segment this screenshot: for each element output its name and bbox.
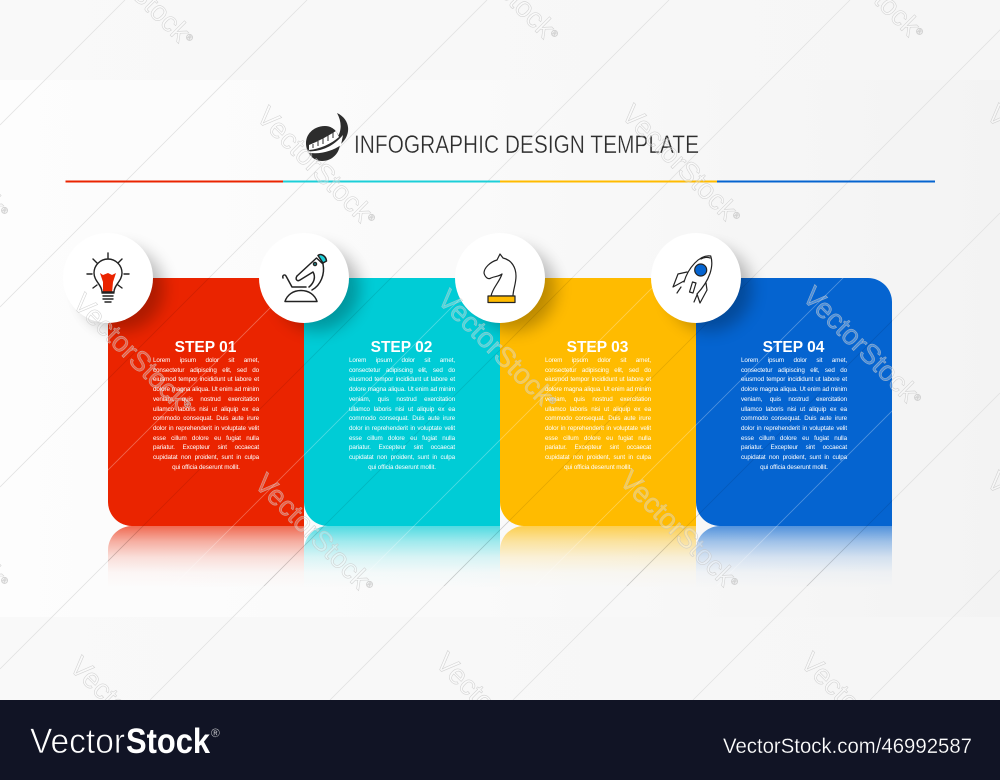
watermarks: VectorStock xyxy=(616,98,743,226)
footer logo: Vector xyxy=(30,722,125,761)
circle badge: step 04 with rocket icon xyxy=(651,233,752,331)
text block: step 01: ullamco laboris nisi ut aliquip ex ea xyxy=(153,406,259,413)
panel card: step 03 yellow xyxy=(500,278,696,526)
reflection: step 02 xyxy=(304,526,500,588)
watermarks: VectorStock xyxy=(251,100,378,228)
footer url: VectorStock.com/46992587 xyxy=(723,735,972,758)
text block: step 02: qui officia deserunt mollit. xyxy=(368,464,436,471)
reflection: step 03 xyxy=(500,526,696,588)
heading: step 04: STEP 04 xyxy=(763,338,824,356)
footer bar xyxy=(0,700,1000,780)
watermarks: ® xyxy=(549,28,561,40)
text block: step 01: eiusmod tempor incididunt ut labore et xyxy=(153,376,259,383)
watermarks: VectorStock xyxy=(795,646,922,774)
text block: step 03: eiusmod tempor incididunt ut labore et xyxy=(545,376,651,383)
text block: step 02: commodo consequat. Duis aute irure xyxy=(349,415,455,422)
text block: step 04: commodo consequat. Duis aute irure xyxy=(741,415,847,422)
watermarks: ® xyxy=(729,576,741,588)
watermarks: ® xyxy=(912,392,924,404)
text block: step 02: ullamco laboris nisi ut aliquip ex ea xyxy=(349,406,455,413)
text block: step 04: esse cillum dolore eu fugiat nulla xyxy=(741,435,847,442)
icon: microscope xyxy=(283,255,326,302)
watermarks: VectorStock xyxy=(614,464,741,592)
text block: step 01: qui officia deserunt mollit. xyxy=(172,464,240,471)
text block: step 02: eiusmod tempor incididunt ut labore et xyxy=(349,376,455,383)
watermarks: ® xyxy=(910,758,922,770)
text block: step 04 xyxy=(741,357,848,471)
watermarks: ® xyxy=(545,758,557,770)
panel card: step 01 red xyxy=(108,278,304,526)
text block: step 02 xyxy=(349,357,456,471)
heading: step 03: STEP 03 xyxy=(567,338,628,356)
watermarks: ® xyxy=(182,399,194,411)
text block: step 01: Lorem ipsum dolor sit amet, xyxy=(153,357,259,364)
text block: step 04: dolore magna aliqua. Ut enim ad minim xyxy=(741,386,847,393)
text block: step 01: pariatur. Excepteur sint occaecat xyxy=(153,444,259,451)
text block: step 01: cupidatat non proident, sunt in culpa xyxy=(153,454,259,461)
title divider line xyxy=(66,180,935,182)
watermarks: ® xyxy=(914,26,926,38)
text block: step 03: qui officia deserunt mollit. xyxy=(564,464,632,471)
watermarks: ® xyxy=(547,395,559,407)
icon: rocket xyxy=(673,256,712,303)
panel card: step 04 blue xyxy=(696,278,892,526)
circle badge: step 02 with microscope icon xyxy=(259,233,360,331)
text block: step 02: dolore magna aliqua. Ut enim ad minim xyxy=(349,386,455,393)
reflection: step 04 xyxy=(696,526,892,588)
text block: step 03 xyxy=(545,357,652,471)
watermarks: VectorStock xyxy=(67,287,194,415)
footer logo: ® xyxy=(211,726,220,740)
text block: step 01: veniam, quis nostrud exercitation xyxy=(153,396,259,403)
heading: step 01: STEP 01 xyxy=(175,338,236,356)
text block: step 02: consectetur adipiscing elit, sed do xyxy=(349,367,455,374)
text block: step 04: eiusmod tempor incididunt ut labore et xyxy=(741,376,847,383)
text block: step 01: esse cillum dolore eu fugiat nulla xyxy=(153,435,259,442)
circle badge: step 03 with chess knight icon xyxy=(455,233,556,331)
text block: step 03: consectetur adipiscing elit, sed do xyxy=(545,367,651,374)
text block: step 03: commodo consequat. Duis aute irure xyxy=(545,415,651,422)
icon: chess knight xyxy=(484,254,516,302)
text block: step 04: dolor in reprehenderit in voluptate velit xyxy=(741,425,847,432)
text block: step 03: Lorem ipsum dolor sit amet, xyxy=(545,357,651,364)
text block: step 01: consectetur adipiscing elit, sed do xyxy=(153,367,259,374)
text block: step 01: commodo consequat. Duis aute irure xyxy=(153,415,259,422)
text block: step 03: dolore magna aliqua. Ut enim ad minim xyxy=(545,386,651,393)
icon: title logo xyxy=(302,113,348,161)
text block: step 02: pariatur. Excepteur sint occaecat xyxy=(349,444,455,451)
text block: step 02: esse cillum dolore eu fugiat nulla xyxy=(349,435,455,442)
text block: step 04: veniam, quis nostrud exercitation xyxy=(741,396,847,403)
circle badge: step 01 with bulb icon xyxy=(63,233,164,331)
watermarks: ® xyxy=(364,579,376,591)
text block: step 03: veniam, quis nostrud exercitation xyxy=(545,396,651,403)
heading: step 02: STEP 02 xyxy=(371,338,432,356)
text block: step 02: veniam, quis nostrud exercitation xyxy=(349,396,455,403)
icon: light bulb xyxy=(87,253,129,302)
watermarks: ® xyxy=(179,762,191,774)
reflection: step 01 xyxy=(108,526,304,588)
text block: step 01 xyxy=(153,357,260,471)
text block: step 03: cupidatat non proident, sunt in culpa xyxy=(545,454,651,461)
text block: step 04: qui officia deserunt mollit. xyxy=(760,464,828,471)
watermarks: VectorStock xyxy=(64,650,191,778)
text block: step 04: ullamco laboris nisi ut aliquip ex ea xyxy=(741,406,847,413)
watermarks: VectorStock xyxy=(797,280,924,408)
watermarks: ® xyxy=(184,32,196,44)
text block: step 03: ullamco laboris nisi ut aliquip ex ea xyxy=(545,406,651,413)
text block: step 04: Lorem ipsum dolor sit amet, xyxy=(741,357,847,364)
title: INFOGRAPHIC DESIGN TEMPLATE xyxy=(354,131,699,159)
text block: step 02: Lorem ipsum dolor sit amet, xyxy=(349,357,455,364)
text block: step 03: pariatur. Excepteur sint occaecat xyxy=(545,444,651,451)
watermarks: VectorStock xyxy=(432,283,559,411)
text block: step 04: consectetur adipiscing elit, sed do xyxy=(741,367,847,374)
text block: step 03: dolor in reprehenderit in voluptate velit xyxy=(545,425,651,432)
text block: step 03: esse cillum dolore eu fugiat nulla xyxy=(545,435,651,442)
text block: step 04: pariatur. Excepteur sint occaecat xyxy=(741,444,847,451)
footer logo xyxy=(30,722,220,761)
text block: step 04: cupidatat non proident, sunt in culpa xyxy=(741,454,847,461)
watermarks: VectorStock xyxy=(249,467,376,595)
watermarks: ® xyxy=(366,212,378,224)
panel card: step 02 cyan xyxy=(304,278,500,526)
text block: step 02: dolor in reprehenderit in voluptate velit xyxy=(349,425,455,432)
text block: step 01: dolore magna aliqua. Ut enim ad minim xyxy=(153,386,259,393)
text block: step 02: cupidatat non proident, sunt in culpa xyxy=(349,454,455,461)
watermarks: VectorStock xyxy=(430,646,557,774)
text block: step 01: dolor in reprehenderit in voluptate velit xyxy=(153,425,259,432)
watermarks: ® xyxy=(731,210,743,222)
footer logo: Stock xyxy=(126,722,210,761)
